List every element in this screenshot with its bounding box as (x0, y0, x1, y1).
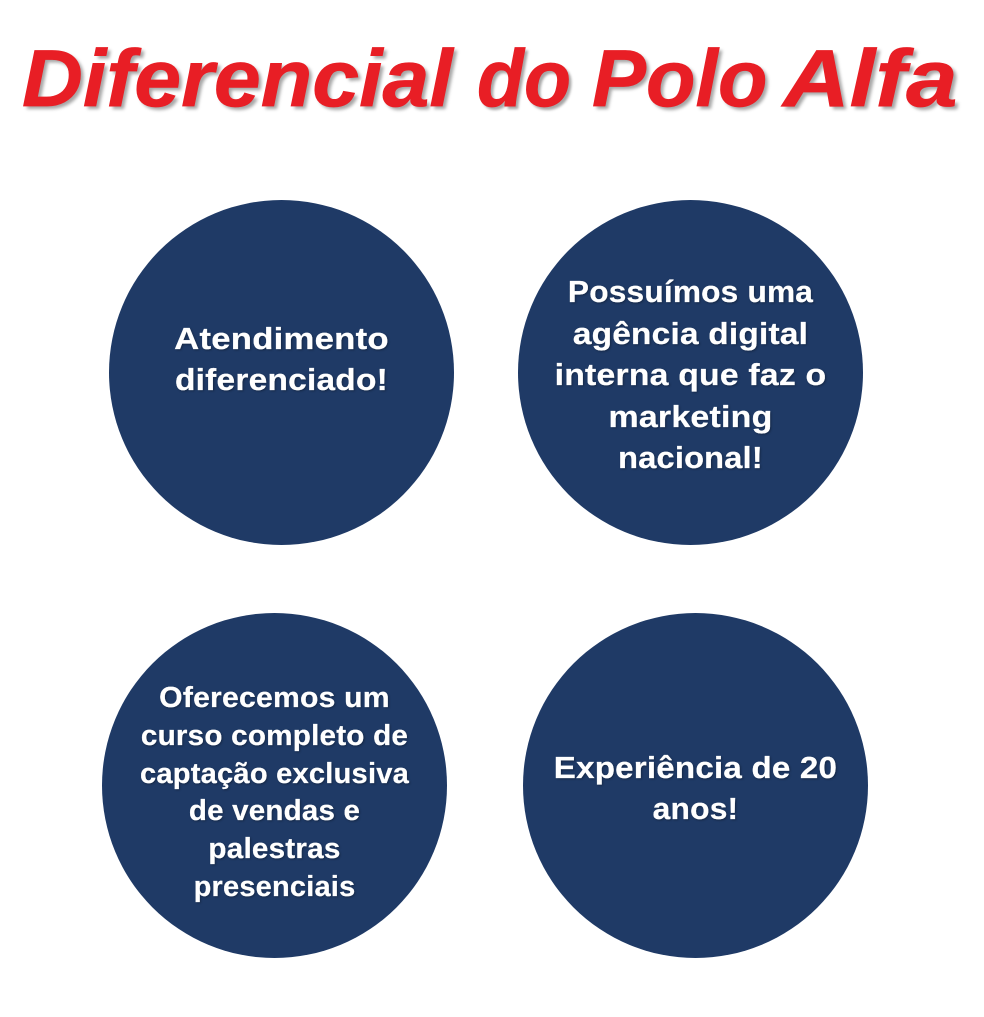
text: agencia digital (555, 274, 826, 475)
text: experiencia: anos! (653, 791, 738, 826)
text: atendimento (174, 321, 389, 397)
circle: atendimento (109, 200, 454, 545)
text: agencia digital: marketing (608, 398, 773, 434)
text: agencia digital: interna que faz o (555, 357, 826, 392)
text: curso completo: presenciais (194, 871, 355, 903)
text: atendimento: Atendimento (174, 321, 389, 356)
text: curso completo: curso completo de (141, 720, 408, 752)
text: experiencia (554, 750, 838, 826)
text: agencia digital: Possuímos uma (568, 274, 813, 309)
circle: agencia digital (518, 200, 863, 545)
text: experiencia: Experiência de 20 (554, 750, 837, 785)
title: Polo (592, 34, 768, 124)
title: Alfa (783, 34, 957, 124)
title: do (477, 34, 571, 124)
text: curso completo: palestras (208, 833, 341, 865)
text: curso completo: de vendas e (189, 795, 360, 827)
text: atendimento: diferenciado! (175, 362, 388, 397)
text: agencia digital: nacional! (618, 440, 763, 475)
title: Diferencial (22, 34, 453, 124)
title (22, 34, 960, 124)
circle: experiencia (523, 613, 868, 958)
circle: curso completo (102, 613, 447, 958)
text: curso completo: Oferecemos um (159, 682, 390, 714)
text: curso completo (140, 682, 410, 904)
text: curso completo: captação exclusiva (140, 758, 409, 790)
text: agencia digital: agência digital (573, 316, 808, 350)
